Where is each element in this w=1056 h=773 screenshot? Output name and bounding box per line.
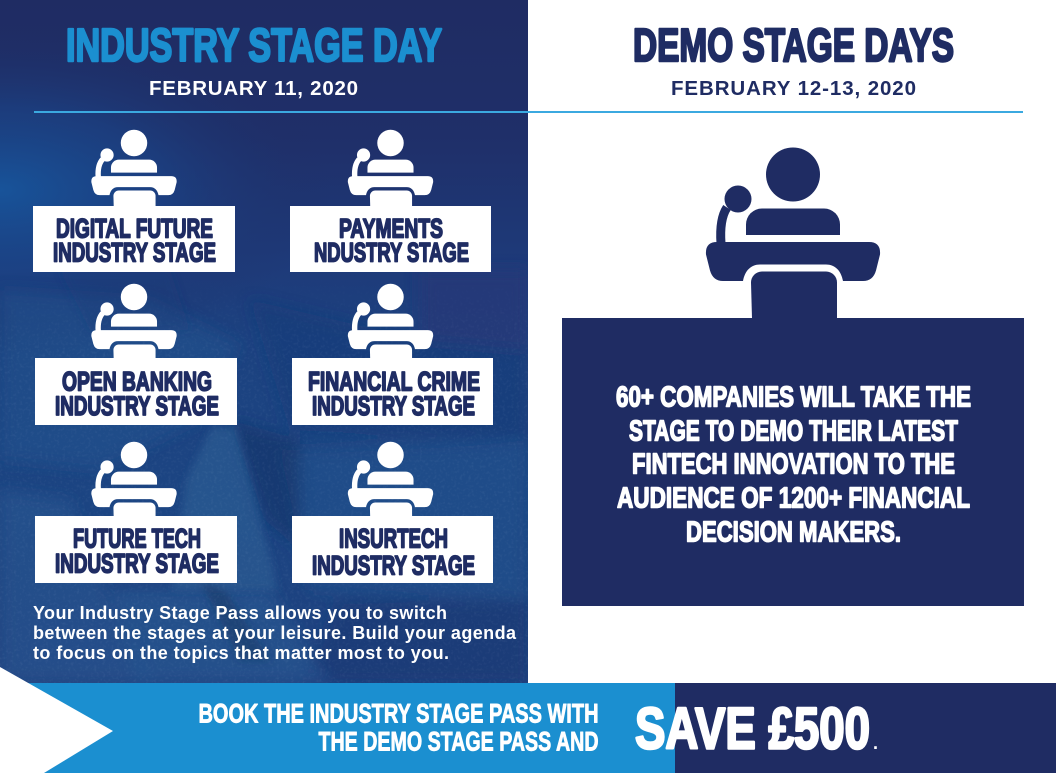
icon: podium speaker, financial crime [348, 284, 433, 368]
text block: stage pass explanation: between the stages at your leisure. Build your agenda [33, 623, 517, 643]
arrow: white chevron notch [0, 667, 113, 773]
text block: stage pass explanation: to focus on the topics that matter most to you. [33, 643, 449, 663]
label: payments industry stage: NDUSTRY STAGE [314, 238, 469, 268]
label: future tech industry stage: INDUSTRY STAGE [55, 548, 219, 578]
panel: demo stage description: DECISION MAKERS. [686, 516, 901, 548]
label: digital future industry stage: DIGITAL FUTURE [56, 214, 213, 244]
banner text: book the pass: BOOK THE INDUSTRY STAGE PASS WITH [198, 698, 598, 728]
icon: podium speaker, insurtech [348, 442, 433, 526]
panel: demo stage description: FINTECH INNOVATION TO THE [632, 448, 955, 480]
panel: demo stage description: 60+ COMPANIES WILL TAKE THE [616, 382, 971, 414]
text block: stage pass explanation [33, 603, 517, 663]
icon: podium speaker, future tech [91, 442, 177, 526]
icon: podium speaker, open banking [91, 284, 177, 368]
label: open banking industry stage: INDUSTRY STAGE [55, 391, 219, 421]
banner text: save 500 pounds: SAVE £500 [635, 696, 870, 762]
banner: book both passes [0, 667, 1056, 773]
label: open banking industry stage [35, 358, 237, 425]
text block: stage pass explanation: Your Industry Stage Pass allows you to switch [33, 603, 447, 623]
label: insurtech industry stage [292, 516, 493, 583]
banner text: book the pass [198, 698, 598, 756]
label: open banking industry stage: OPEN BANKING [62, 366, 212, 396]
icon: podium speaker, payments [348, 130, 433, 214]
label: financial crime industry stage: FINANCIAL CRIME [308, 366, 480, 396]
label: future tech industry stage [35, 516, 237, 583]
title: industry stage day: INDUSTRY STAGE DAY [66, 19, 442, 71]
label: financial crime industry stage [292, 358, 493, 425]
label: payments industry stage: PAYMENTS [339, 214, 443, 244]
label: future tech industry stage: FUTURE TECH [73, 524, 201, 554]
date: february 11: FEBRUARY 11, 2020 [149, 77, 358, 100]
icon: large podium speaker [706, 148, 880, 318]
date: february 12-13: FEBRUARY 12-13, 2020 [671, 77, 916, 100]
label: payments industry stage [290, 206, 491, 272]
icon: podium speaker, digital future [91, 130, 177, 214]
label: digital future industry stage [33, 206, 235, 272]
label: insurtech industry stage: INDUSTRY STAGE [312, 550, 475, 580]
panel: demo stage description: AUDIENCE OF 1200+ FINANCIAL [617, 482, 970, 514]
panel: industry stage day background [0, 0, 528, 683]
banner text: save 500 pounds: . [873, 733, 878, 753]
white panel: demo stage days background [528, 0, 1056, 683]
banner text: book the pass: THE DEMO STAGE PASS AND [318, 726, 598, 756]
panel: demo stage description [562, 318, 1024, 606]
label: insurtech industry stage: INSURTECH [339, 524, 448, 554]
label: financial crime industry stage: INDUSTRY STAGE [312, 391, 475, 421]
label: digital future industry stage: INDUSTRY STAGE [53, 238, 216, 268]
